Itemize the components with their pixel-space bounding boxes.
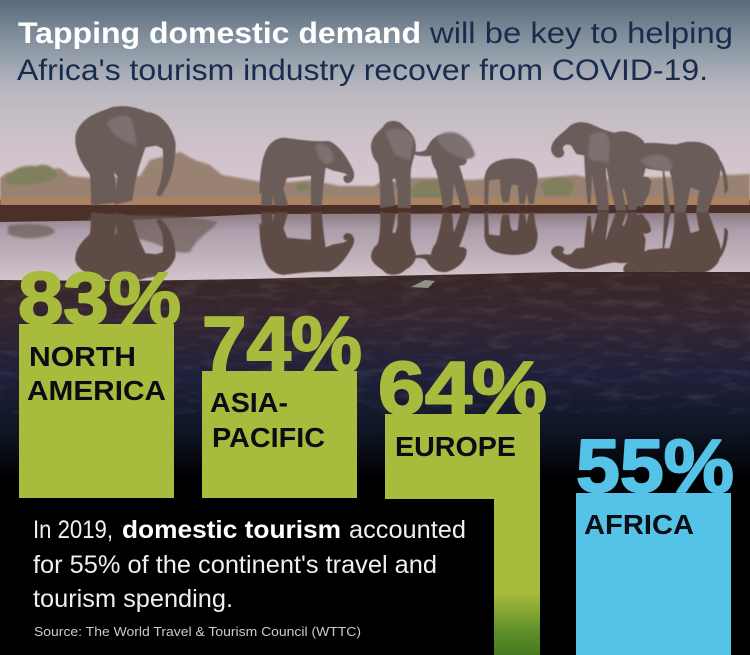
value 55%: 55%	[576, 424, 734, 508]
foreground mud	[0, 272, 750, 480]
dark shoreline	[0, 205, 750, 224]
label North America: NORTH	[29, 341, 136, 372]
body text: In 2019,	[33, 516, 113, 544]
value 64%: 64%	[378, 346, 547, 430]
body text: for 55% of the continent's travel and	[33, 551, 437, 579]
label Africa: AFRICA	[584, 509, 694, 540]
black base	[0, 476, 750, 655]
label North America	[27, 341, 166, 406]
label North America: AMERICA	[27, 375, 166, 406]
title line 1 rest: will be key to helping	[429, 17, 733, 50]
label Asia-Pacific: ASIA-	[210, 387, 288, 418]
distant scrub and trees	[0, 152, 750, 200]
body text	[33, 516, 466, 613]
elephant ears	[107, 116, 672, 171]
value 83%: 83%	[18, 257, 181, 340]
body text: accounted	[349, 516, 466, 544]
rock on the shore	[411, 280, 435, 288]
value 74%: 74%	[202, 300, 362, 388]
title emphasis: Tapping domestic demand	[18, 17, 421, 50]
label Europe: EUROPE	[395, 431, 516, 462]
waterhole	[0, 213, 750, 284]
bar: Africa 55%	[576, 424, 734, 655]
label Asia-Pacific: PACIFIC	[212, 422, 325, 453]
mud texture	[0, 274, 750, 414]
title	[17, 17, 733, 87]
title line 2: Africa's tourism industry recover from COVID-19.	[17, 54, 708, 87]
source note: Source: The World Travel & Tourism Council (WTTC)	[34, 625, 361, 639]
bush reflections	[8, 215, 218, 253]
elephant reflections	[76, 211, 727, 281]
sky	[0, 0, 750, 200]
body text: domestic tourism	[122, 516, 341, 544]
elephants	[76, 107, 727, 212]
label Asia-Pacific	[210, 387, 325, 453]
far bank	[0, 198, 750, 206]
bar: Europe 64%	[378, 346, 547, 655]
body text: tourism spending.	[33, 585, 233, 613]
bar: Asia-Pacific 74%	[202, 300, 362, 498]
bar: North America 83%	[18, 257, 181, 498]
